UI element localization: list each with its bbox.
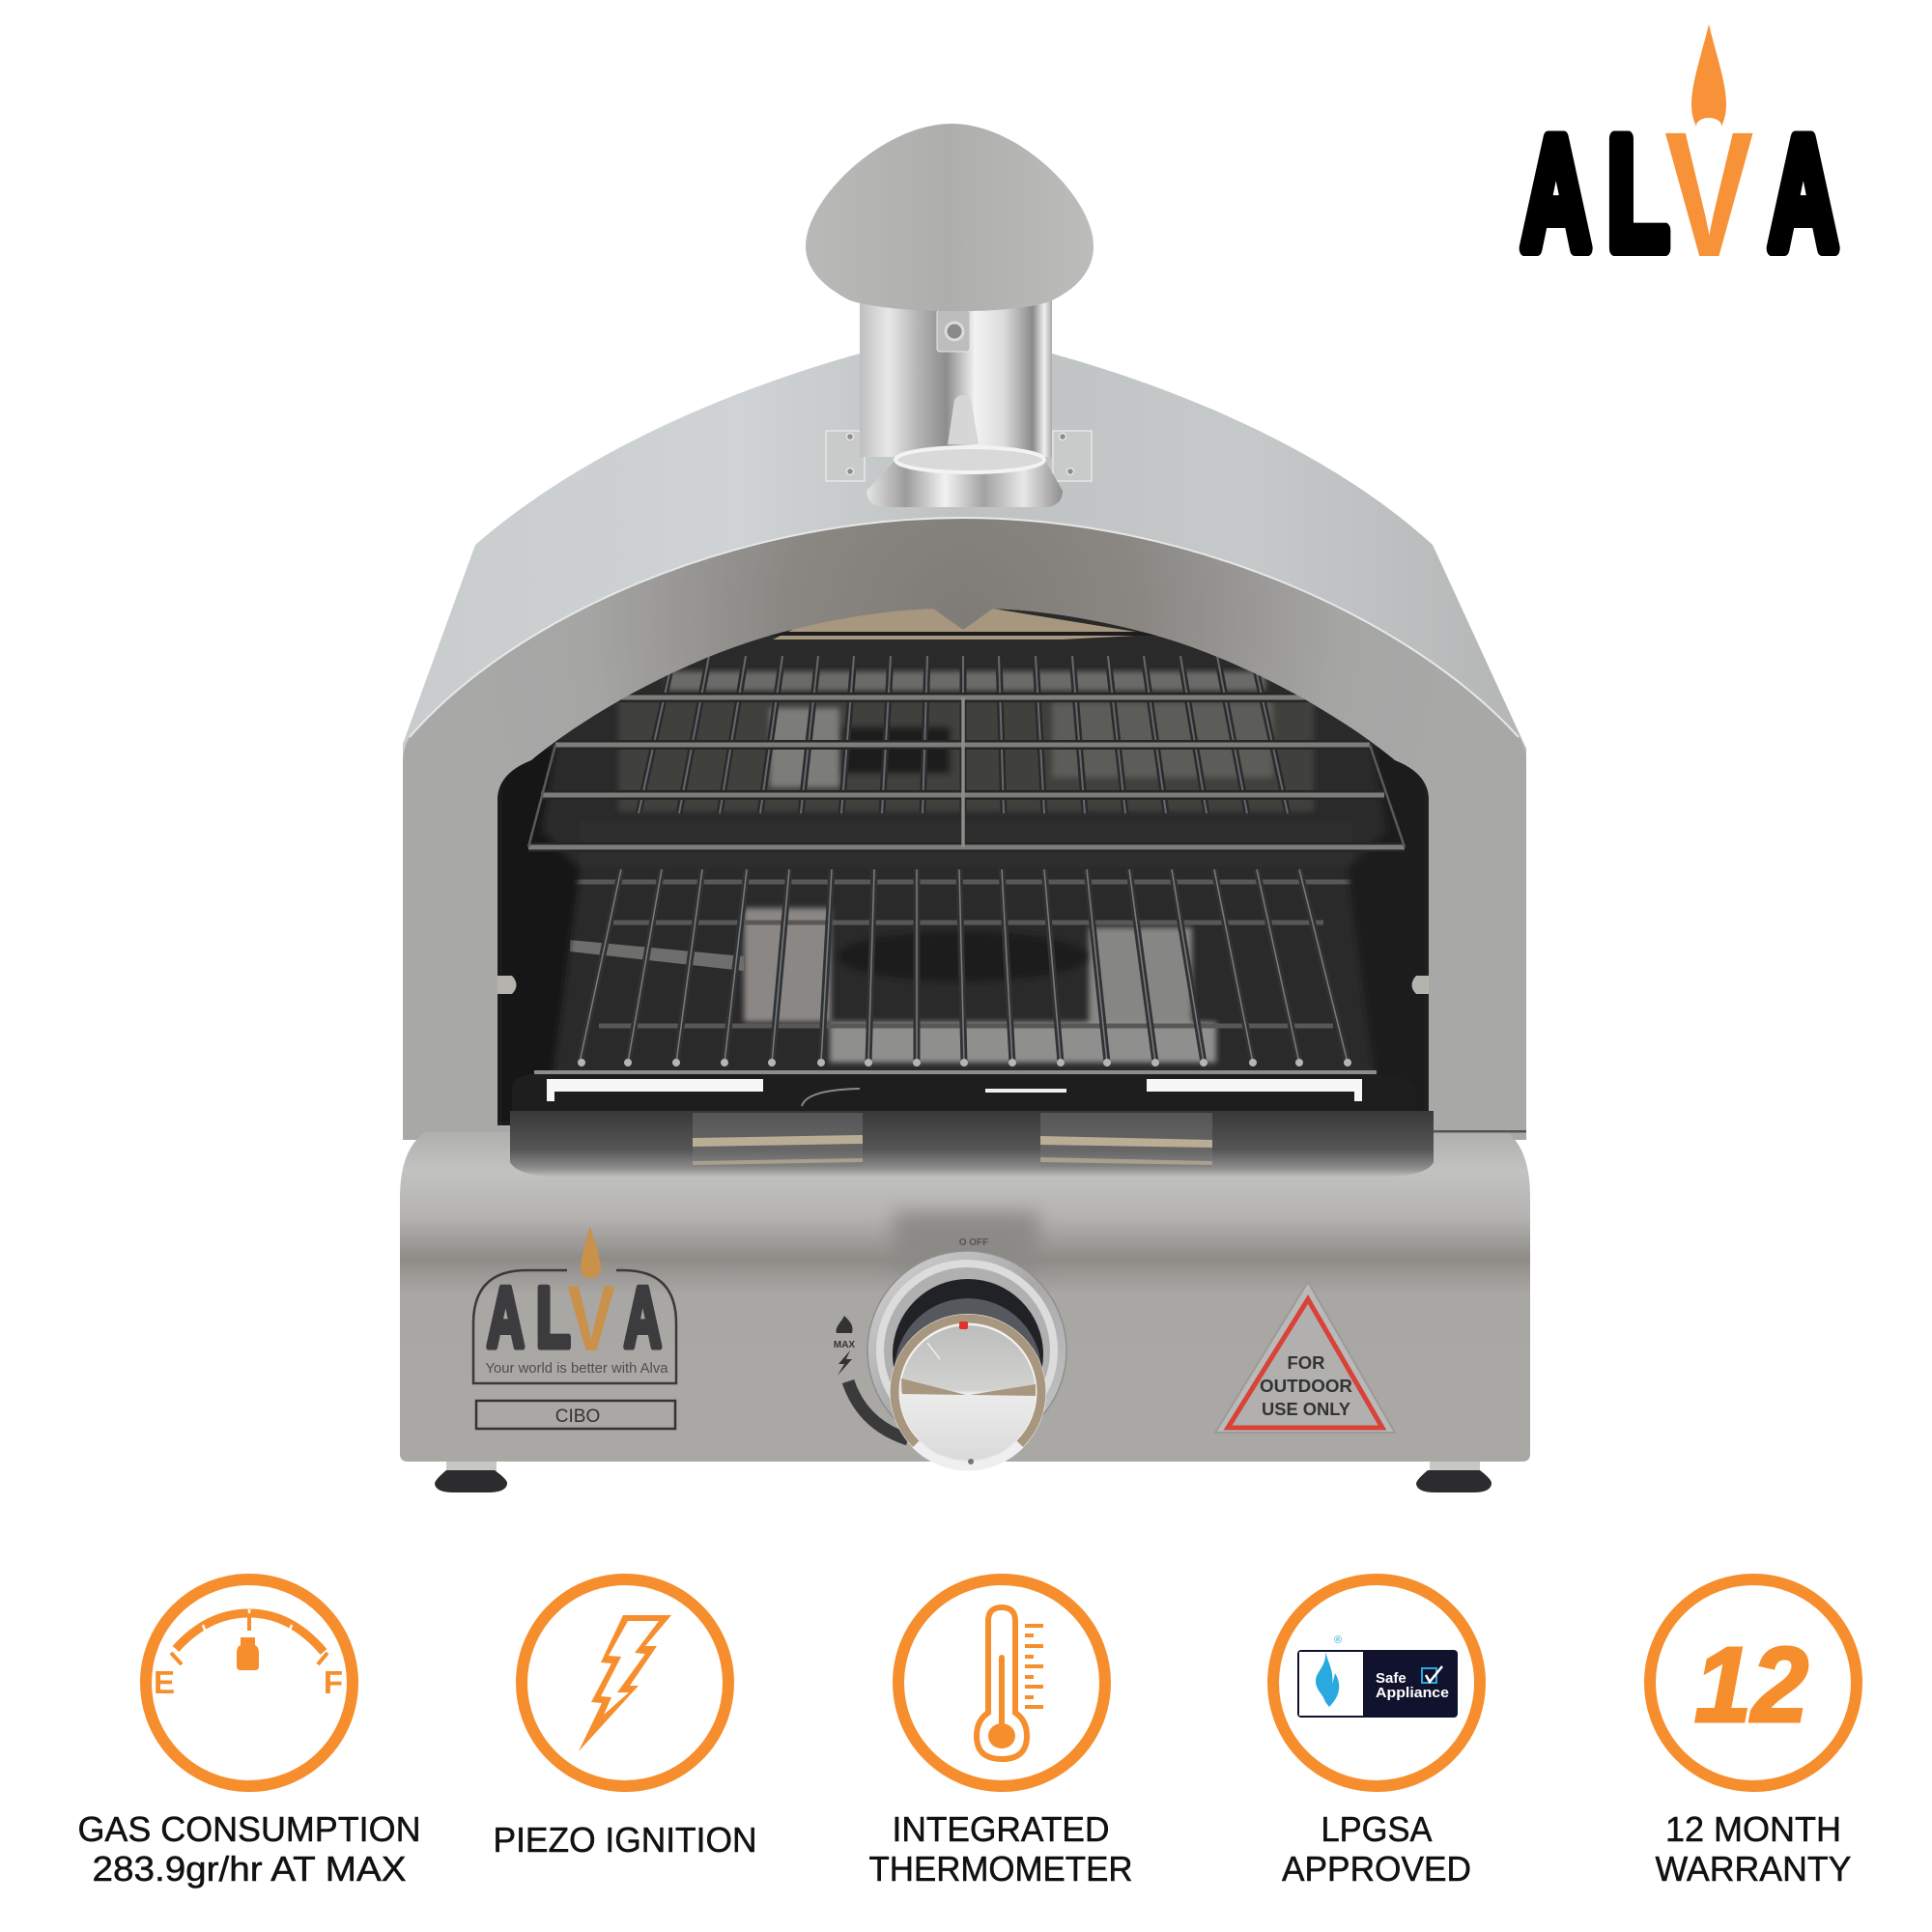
arch edge highlight bbox=[410, 518, 1519, 737]
control knob bbox=[867, 1251, 1066, 1470]
icon: 12 badge bbox=[1650, 1579, 1857, 1786]
feature: 12 month warranty bbox=[1650, 1579, 1857, 1889]
icon: 12 badge: 12 bbox=[1694, 1626, 1808, 1745]
model plate: CIBO bbox=[476, 1401, 675, 1429]
label: PIEZO IGNITION bbox=[493, 1820, 757, 1860]
warning triangle: for outdoor use only: USE ONLY bbox=[1262, 1399, 1351, 1419]
feature: LPGSA approved bbox=[1273, 1579, 1480, 1889]
product photo: pizza oven bbox=[400, 124, 1530, 1492]
warning triangle: for outdoor use only bbox=[1215, 1282, 1395, 1433]
icon: safe appliance badge bbox=[1273, 1579, 1480, 1786]
icon: lightning bolt bbox=[522, 1579, 728, 1786]
oven badge: Alva logo plate: A bbox=[487, 1271, 525, 1365]
label: APPROVED bbox=[1282, 1849, 1471, 1889]
label: GAS CONSUMPTION bbox=[77, 1809, 421, 1849]
warning triangle: for outdoor use only: FOR bbox=[1287, 1352, 1325, 1373]
label: 12 MONTH bbox=[1665, 1809, 1841, 1849]
icon: fuel gauge: E bbox=[154, 1664, 175, 1700]
logo wordmark: A bbox=[1521, 104, 1590, 282]
icon: safe appliance badge: ® bbox=[1334, 1634, 1342, 1646]
lower wire rack bbox=[534, 869, 1377, 1072]
label bbox=[1656, 1809, 1851, 1889]
oven feet bbox=[435, 1462, 1492, 1492]
feature: integrated thermometer bbox=[869, 1579, 1132, 1889]
logo wordmark: V bbox=[1664, 95, 1753, 295]
icon: thermometer bbox=[898, 1579, 1105, 1786]
label: 283.9gr/hr AT MAX bbox=[93, 1849, 406, 1889]
vent slots on side walls bbox=[497, 976, 1429, 994]
logo wordmark: L bbox=[1607, 105, 1668, 283]
reflective shelf bbox=[510, 1111, 1434, 1177]
icon: logo flame bbox=[1691, 24, 1726, 133]
chimney collar bbox=[867, 447, 1063, 507]
model plate: CIBO: CIBO bbox=[555, 1406, 600, 1427]
oven badge: Alva logo plate: A bbox=[624, 1271, 662, 1365]
dial markings: off, flame, max and spark: MAX bbox=[834, 1340, 855, 1350]
oven badge: Alva logo plate bbox=[473, 1226, 676, 1383]
dial markings: off, flame, max and spark: O OFF bbox=[959, 1237, 988, 1248]
label bbox=[1282, 1809, 1471, 1889]
oven badge: Alva logo plate: V bbox=[567, 1267, 615, 1371]
label bbox=[869, 1809, 1132, 1889]
icon: safe appliance badge: Appliance bbox=[1376, 1685, 1449, 1701]
warning triangle: for outdoor use only: OUTDOOR bbox=[1260, 1376, 1352, 1396]
feature: gas consumption bbox=[77, 1579, 421, 1889]
chimney pipe bbox=[860, 295, 1052, 457]
chimney cap bbox=[806, 124, 1094, 311]
burner tray and white slits bbox=[512, 1074, 1415, 1111]
feature: piezo ignition bbox=[493, 1579, 757, 1860]
icon: fuel gauge: F bbox=[324, 1664, 343, 1700]
oven rear dome shell bbox=[403, 354, 1526, 869]
label: INTEGRATED bbox=[893, 1809, 1109, 1849]
chimney mounting plates bbox=[826, 431, 1092, 481]
icon: safe appliance badge: Safe bbox=[1376, 1670, 1406, 1687]
oven base bbox=[400, 1111, 1530, 1462]
oven arch front face bbox=[403, 518, 1526, 1140]
oven interior bbox=[493, 604, 1435, 1125]
oven badge: Alva logo plate: Your world is better with Alva bbox=[485, 1361, 668, 1377]
oven badge: Alva logo plate: L bbox=[536, 1270, 570, 1365]
icon: fuel gauge bbox=[146, 1579, 353, 1786]
upper wire rack bbox=[528, 656, 1405, 847]
brand logo: Alva bbox=[1521, 24, 1837, 295]
dial markings: off, flame, max and spark bbox=[834, 1237, 988, 1439]
logo wordmark bbox=[1521, 95, 1837, 295]
label bbox=[77, 1809, 421, 1889]
logo wordmark: A bbox=[1769, 104, 1837, 282]
label: WARRANTY bbox=[1656, 1849, 1851, 1889]
label: THERMOMETER bbox=[869, 1849, 1132, 1889]
label: LPGSA bbox=[1321, 1809, 1432, 1849]
